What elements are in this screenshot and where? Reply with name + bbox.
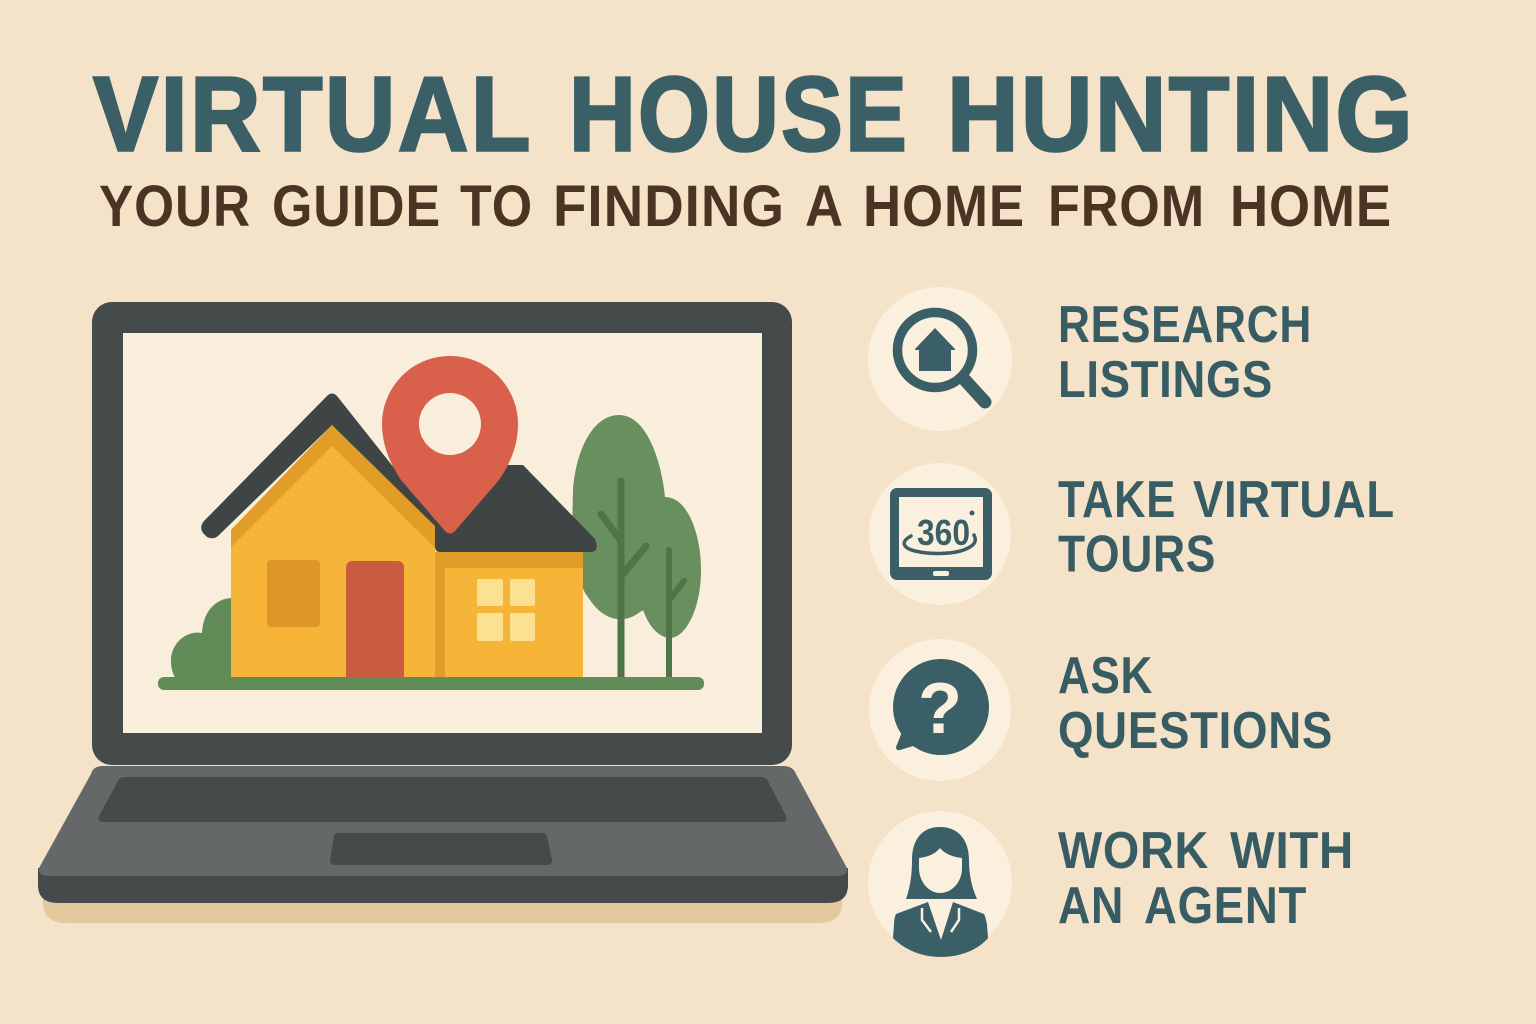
- label: take virtual tours: TOURS: [1058, 526, 1216, 584]
- house wing wall: [435, 552, 583, 678]
- house scene: [158, 356, 704, 690]
- laptop shadow: [43, 890, 842, 923]
- laptop lid and bezel: [92, 302, 792, 765]
- four-pane window: [477, 579, 535, 641]
- subtitle: FROM: [1048, 174, 1205, 239]
- icon: agent figure: [868, 811, 1012, 957]
- location pin: [382, 356, 518, 534]
- subtitle: YOUR: [99, 174, 251, 239]
- keyboard: [99, 777, 786, 822]
- label: take virtual tours: TAKE: [1058, 471, 1176, 529]
- item: work with an agent: [868, 811, 1369, 957]
- icon: 360 tablet: 360: [917, 512, 970, 553]
- title: HUNTING: [947, 56, 1415, 174]
- wing roof: [435, 465, 597, 552]
- icon: magnifying glass with house: [868, 287, 1012, 431]
- label: research listings: LISTINGS: [1058, 351, 1273, 409]
- label: work with an agent: AGENT: [1144, 877, 1307, 935]
- label: ask questions: QUESTIONS: [1058, 702, 1333, 760]
- item: take virtual tours: [869, 463, 1409, 605]
- small tree trunk: [669, 550, 684, 678]
- title: VIRTUAL: [93, 56, 531, 174]
- item: ask questions: [869, 639, 1333, 781]
- icon: question speech bubble: ?: [918, 669, 962, 749]
- laptop illustration: [38, 302, 848, 923]
- house gable shadow: [231, 425, 435, 548]
- subtitle: FINDING: [553, 174, 785, 239]
- subtitle: HOME: [1230, 174, 1392, 239]
- subtitle: A: [805, 174, 842, 239]
- tall tree: [572, 415, 701, 678]
- subtitle: TO: [460, 174, 533, 239]
- item: research listings: [868, 287, 1327, 431]
- label: work with an agent: WITH: [1230, 822, 1354, 880]
- main roof: [201, 394, 437, 538]
- label: work with an agent: WORK: [1058, 822, 1209, 880]
- laptop base: [38, 766, 848, 903]
- house main wall: [231, 425, 435, 678]
- ground: [158, 677, 704, 690]
- icon: 360 tablet: [869, 463, 1011, 605]
- title: HOUSE: [569, 56, 909, 174]
- label: research listings: RESEARCH: [1058, 296, 1312, 354]
- trackpad: [330, 833, 552, 865]
- small window: [267, 560, 320, 627]
- subtitle: GUIDE: [272, 174, 441, 239]
- bush: [171, 598, 231, 680]
- screen: [123, 333, 762, 733]
- icon: question speech bubble: [869, 639, 1011, 781]
- label: ask questions: ASK: [1058, 647, 1153, 705]
- door: [346, 561, 404, 678]
- subtitle: HOME: [863, 174, 1025, 239]
- label: work with an agent: AN: [1058, 877, 1124, 935]
- wing shadow: [435, 552, 583, 678]
- label: take virtual tours: VIRTUAL: [1193, 471, 1394, 529]
